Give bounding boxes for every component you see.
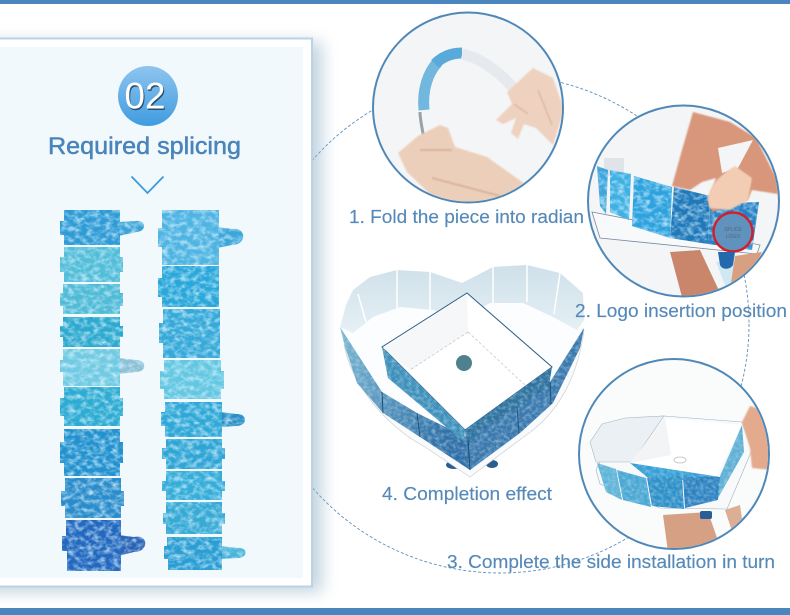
back fingers: [670, 250, 722, 297]
logo position marker: [714, 212, 752, 252]
pale base: [716, 262, 754, 285]
label: step 1: 1. Fold the piece into radian: [349, 207, 584, 227]
feet: [446, 461, 462, 469]
back walls: [590, 416, 664, 462]
inner box top: [382, 293, 552, 430]
floor: [340, 265, 584, 438]
blue wall panels: [597, 166, 759, 250]
top bar: [0, 0, 790, 4]
back walls: [340, 265, 584, 333]
front left wall: [340, 327, 470, 470]
right hand: [742, 406, 772, 470]
step 2 photo circle: [588, 106, 779, 297]
center hole outline: [674, 457, 686, 463]
left hand shading: [420, 150, 500, 196]
inner box: [637, 442, 646, 454]
icon: chevron down: [132, 176, 164, 193]
right strip of puzzle pieces: [158, 210, 246, 570]
wall joints: [382, 382, 551, 470]
inner box right face: [465, 367, 552, 441]
logo position marker: LOGO: [726, 234, 740, 240]
left hand: [398, 124, 524, 202]
inner box walls: [383, 294, 468, 370]
base plate: [596, 416, 752, 509]
center magnet dot: [456, 355, 472, 371]
inner box left face: [382, 347, 465, 442]
panel: required splicing: [0, 38, 322, 592]
thumb: [708, 166, 752, 210]
label: step 2: 2. Logo insertion position: [575, 301, 787, 321]
bottom bar: [0, 608, 790, 615]
badge: 02: 02: [124, 76, 166, 116]
gap between fingers: [718, 140, 753, 173]
back wall stub: [604, 158, 624, 176]
right foot: [486, 460, 498, 468]
base plate: [592, 212, 760, 254]
base plate: [344, 300, 584, 477]
blue side walls: [597, 425, 744, 509]
dark blue tab: [718, 252, 735, 269]
logo position marker: SPLICE: [724, 227, 743, 233]
dashed connecting circle: [251, 75, 749, 573]
dark tab: [700, 511, 712, 519]
badge: 02: 02: [126, 77, 166, 118]
inner box floor line: [410, 332, 525, 385]
label: step 4: 4. Completion effect: [382, 484, 552, 504]
wall slots: [358, 265, 560, 322]
right hand: [496, 68, 564, 145]
step 3 photo circle: [579, 359, 772, 552]
left strip of puzzle pieces: [60, 210, 145, 571]
hand holding the strip: [672, 112, 778, 212]
step 1 photo circle: [373, 12, 564, 212]
right hand shading: [514, 90, 552, 125]
badge: 02: [118, 66, 178, 126]
heart box: completion effect: [340, 265, 584, 477]
folded strip: [424, 53, 517, 110]
heading: required splicing: Required splicing: [48, 133, 241, 160]
lower fingers: [663, 512, 717, 548]
label: step 3: 3. Complete the side installation in turn: [447, 552, 775, 572]
lower right finger: [731, 252, 762, 283]
front right wall: [468, 328, 584, 470]
